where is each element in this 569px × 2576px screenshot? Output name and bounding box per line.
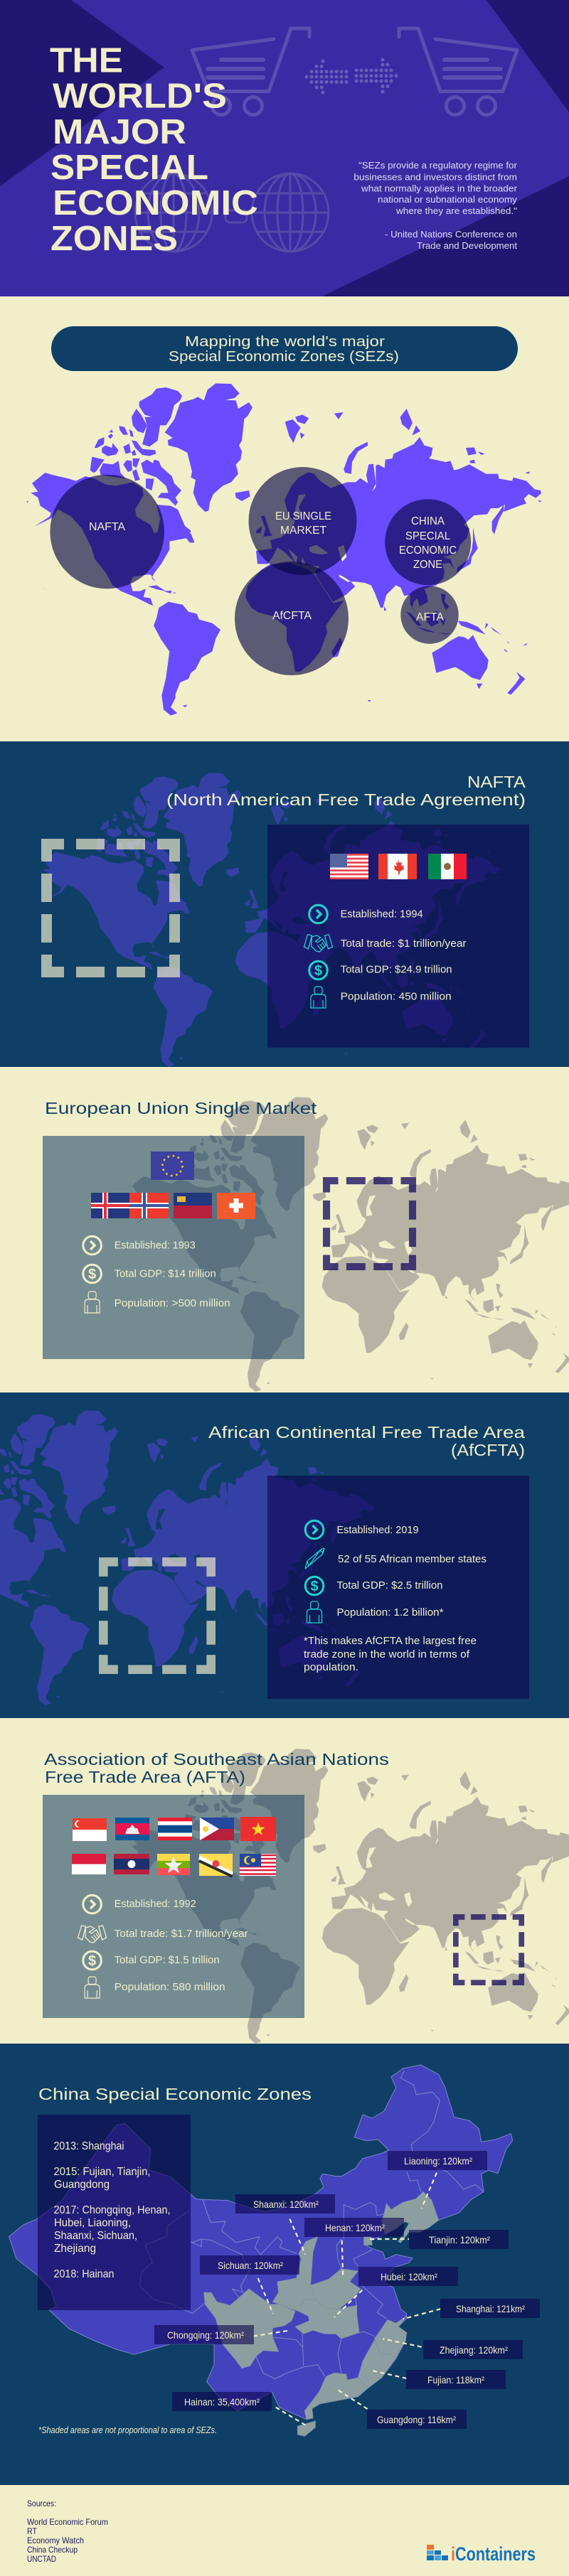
circle: AfCFTA (235, 562, 349, 675)
icon: right globe (252, 173, 329, 252)
heading: NAFTA (467, 773, 526, 791)
label: Tianjin (409, 2230, 509, 2249)
flag: Cambodia (115, 1818, 149, 1840)
label: Zhejiang (423, 2340, 523, 2359)
quote (353, 160, 518, 251)
circle: AFTA: AFTA (416, 611, 444, 623)
fact: total GDP (305, 1577, 442, 1595)
quote: "SEZs provide a regulatory regime for (358, 160, 518, 171)
fact: established: Established: 1992 (115, 1898, 196, 1910)
fact: established: Established: 2019 (337, 1524, 418, 1536)
label: Liaoning: Liaoning: 120km² (404, 2155, 472, 2167)
timeline box (38, 2115, 191, 2310)
timeline box: Shaanxi, Sichuan, (54, 2230, 137, 2242)
dashed region marker (47, 844, 175, 972)
fact: established (305, 1520, 418, 1539)
panel: world map overview (0, 296, 569, 741)
heading: African Continental Free Trade Area (208, 1423, 525, 1442)
heading: China Special Economic Zones (38, 2085, 312, 2103)
label: Henan: Henan: 120km² (325, 2222, 385, 2233)
circle: NAFTA (50, 475, 164, 589)
fact: total GDP: Total GDP: $24.9 trillion (341, 964, 452, 976)
quote: what normally applies in the broader (361, 183, 518, 193)
quote: national or subnational economy (378, 194, 518, 205)
panel: hero header (0, 0, 569, 296)
flag: Laos (114, 1854, 149, 1874)
quote: - United Nations Conference on (385, 229, 517, 240)
timeline box: Guangdong (54, 2179, 110, 2191)
footnote: trade zone in the world in terms of (304, 1648, 470, 1660)
background map (0, 1410, 376, 1705)
sources: Economy Watch (27, 2535, 84, 2545)
fact: established (309, 905, 423, 923)
sources: World Economic Forum (27, 2517, 108, 2527)
flag: Myanmar (157, 1854, 190, 1875)
panel: footer (0, 2485, 569, 2576)
footnote: population. (304, 1661, 358, 1673)
fact: total GDP (83, 1951, 220, 1970)
label: Guangdong (367, 2410, 467, 2429)
fact: population: Population: 580 million (115, 1981, 225, 1993)
shaded provinces (204, 2191, 439, 2436)
timeline box: 2018: Hainan (54, 2268, 114, 2280)
label: Henan (304, 2218, 404, 2237)
flag: Philippines (200, 1818, 234, 1840)
heading pill (51, 326, 518, 371)
label: Hainan (172, 2392, 272, 2411)
fact: members (305, 1548, 486, 1569)
quote: where they are established." (395, 205, 517, 216)
sources: RT (27, 2526, 38, 2536)
title: WORLD'S (53, 77, 227, 115)
heading pill: Special Economic Zones (SEZs) (169, 349, 399, 365)
circle: China SEZ (385, 499, 471, 585)
timeline box: 2015: Fujian, Tianjin, (54, 2166, 151, 2178)
fact: total trade: Total trade: $1 trillion/year (341, 938, 467, 950)
flag: Canada (378, 854, 417, 879)
timeline box: Zhejiang (54, 2243, 96, 2255)
flag: Thailand (158, 1818, 192, 1840)
label: Hubei (358, 2267, 458, 2286)
fact: established: Established: 1994 (341, 908, 423, 921)
logo: iContainers (427, 2543, 536, 2565)
panel: NAFTA (0, 741, 569, 1067)
panel: AfCFTA (0, 1392, 569, 1718)
label: Fujian: Fujian: 118km² (427, 2374, 484, 2386)
info box (267, 825, 529, 1048)
flag: Malaysia (240, 1854, 276, 1876)
title: ZONES (50, 220, 178, 258)
panel: AFTA (43, 1749, 569, 2044)
circle: EU single market: MARKET (280, 525, 326, 537)
flag: USA (330, 854, 368, 879)
fact: established (83, 1895, 196, 1914)
heading pill: Mapping the world's major (185, 334, 385, 350)
label: Hainan: Hainan: 35,400km² (184, 2396, 260, 2408)
timeline box: Hubei, Liaoning, (54, 2217, 131, 2229)
label: Chongqing: Chongqing: 120km² (167, 2329, 244, 2341)
footnote (304, 1635, 477, 1673)
label: Shanghai (440, 2299, 540, 2318)
fact: total GDP: Total GDP: $1.5 trillion (115, 1954, 220, 1966)
circle: AFTA (400, 586, 459, 644)
panel: European Union Single Market (43, 1097, 569, 1392)
fact: population (85, 1292, 230, 1313)
flag: EU (151, 1152, 194, 1180)
label: Tianjin: Tianjin: 120km² (429, 2234, 490, 2245)
heading: European Union Single Market (45, 1099, 317, 1117)
info box (43, 1795, 304, 2018)
flag: Iceland (91, 1193, 129, 1218)
fact: total GDP (309, 961, 452, 980)
quote: businesses and investors distinct from (353, 171, 517, 182)
flag: Brunei (199, 1854, 233, 1877)
leader lines (253, 2173, 440, 2427)
fact: total trade (78, 1926, 248, 1943)
icon: left shopping cart (192, 28, 309, 115)
label: Shaanxi (235, 2194, 335, 2213)
title: ECONOMIC (53, 184, 258, 222)
fact: population (85, 1977, 225, 1998)
timeline box: 2013: Shanghai (54, 2140, 124, 2152)
label: Liaoning (388, 2151, 487, 2170)
label: Shaanxi: Shaanxi: 120km² (253, 2199, 319, 2210)
fact: established (83, 1236, 196, 1255)
sources: China Checkup (27, 2545, 78, 2555)
footnote: *This makes AfCFTA the largest free (304, 1635, 477, 1647)
heading: (AfCFTA) (451, 1441, 525, 1459)
fact: members: 52 of 55 African member states (338, 1553, 486, 1565)
flag: Singapore (73, 1818, 107, 1841)
fact: established: Established: 1993 (115, 1240, 196, 1252)
dashed region marker (326, 1181, 413, 1267)
fact: population (311, 987, 452, 1008)
circle: China SEZ: ECONOMIC (399, 544, 457, 557)
label: Sichuan (200, 2255, 299, 2275)
label: Zhejiang: Zhejiang: 120km² (440, 2344, 508, 2356)
logo: iContainers: iContainers (451, 2543, 536, 2565)
heading: (North American Free Trade Agreement) (166, 790, 526, 809)
label: Chongqing (154, 2325, 254, 2344)
icon: dotted right arrow (356, 60, 400, 92)
heading (44, 1750, 389, 1786)
title: THE (50, 41, 123, 80)
flag: Vietnam (240, 1817, 276, 1841)
icon: globe connector (225, 210, 247, 222)
flag: Switzerland (217, 1193, 255, 1219)
label: Fujian (406, 2370, 506, 2389)
flag: Indonesia (72, 1854, 106, 1874)
fact: population: Population: >500 million (115, 1297, 230, 1309)
title: SPECIAL (50, 149, 208, 187)
info box (43, 1136, 304, 1359)
sources (27, 2499, 108, 2564)
circle: EU single market (249, 467, 357, 575)
dashed region marker (456, 1917, 521, 1982)
map footnote: *Shaded areas are not proportional to area of SEZs. (38, 2425, 217, 2435)
flag: Liechtenstein (174, 1193, 212, 1218)
heading: Free Trade Area (AFTA) (45, 1768, 245, 1786)
fact: total GDP (83, 1265, 216, 1283)
world map (26, 383, 542, 716)
circle: China SEZ: SPECIAL (405, 530, 450, 542)
map of China (9, 2065, 513, 2436)
info box (267, 1476, 529, 1699)
fact: total trade (304, 935, 467, 952)
flag: Norway (129, 1193, 169, 1218)
quote: Trade and Development (417, 240, 517, 251)
heading (166, 773, 526, 809)
fact: total GDP: Total GDP: $14 trillion (115, 1268, 216, 1280)
fact: population: Population: 1.2 billion* (337, 1606, 444, 1619)
icon: right shopping cart (399, 28, 517, 115)
icon: left globe (135, 173, 212, 252)
heading: Association of Southeast Asian Nations (44, 1750, 389, 1769)
heading (208, 1423, 525, 1459)
fact: total trade: Total trade: $1.7 trillion/year (115, 1928, 248, 1940)
fact: total GDP: Total GDP: $2.5 trillion (337, 1579, 442, 1592)
fact: population: Population: 450 million (341, 991, 452, 1003)
circle: China SEZ: ZONE (413, 559, 442, 571)
timeline box: 2017: Chongqing, Henan, (54, 2204, 171, 2216)
dashed region marker (103, 1562, 211, 1670)
sources: Sources: (27, 2499, 56, 2508)
label: Sichuan: Sichuan: 120km² (218, 2260, 283, 2271)
background map (127, 1749, 569, 2044)
label: Hubei: Hubei: 120km² (381, 2271, 437, 2282)
fact: population (307, 1601, 444, 1623)
label: Guangdong: Guangdong: 116km² (377, 2414, 456, 2425)
sources: UNCTAD (27, 2554, 56, 2564)
circle: AfCFTA: AfCFTA (272, 610, 312, 622)
circle: EU single market: EU SINGLE (275, 510, 331, 522)
background map (39, 773, 501, 1067)
label: Shanghai: Shanghai: 121km² (456, 2303, 525, 2314)
icon: dotted left arrow (307, 61, 351, 92)
background map (127, 1097, 569, 1392)
title (50, 41, 258, 258)
flag: Mexico (428, 854, 467, 879)
title: MAJOR (53, 113, 186, 151)
panel: China Special Economic Zones (0, 2044, 569, 2485)
circle: NAFTA: NAFTA (89, 521, 125, 533)
circle: China SEZ: CHINA (411, 515, 445, 527)
